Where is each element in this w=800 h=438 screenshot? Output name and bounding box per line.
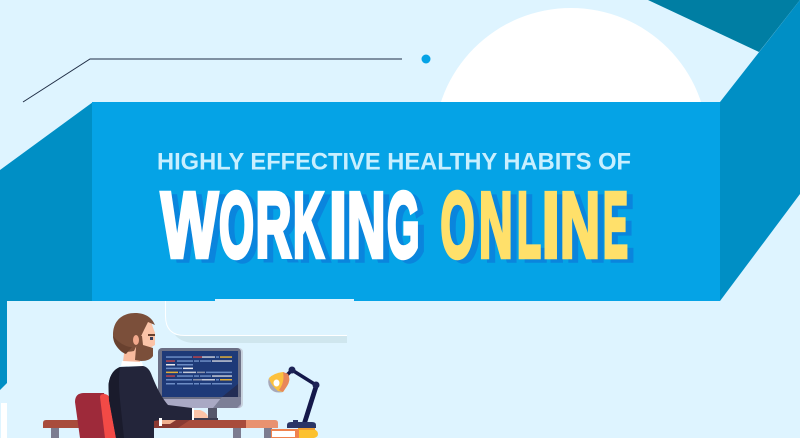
title shadow: I: [548, 176, 566, 280]
code lines: [166, 356, 232, 384]
word: online: I: [542, 173, 560, 277]
word: online: N: [479, 173, 513, 277]
word: online: O: [440, 173, 474, 277]
title shadow: W: [167, 176, 224, 280]
title shadow: N: [566, 176, 606, 280]
word: working: W: [161, 173, 218, 277]
title shadow: R: [262, 176, 298, 280]
white strip at left edge: [1, 403, 7, 438]
left ribbon fold: [0, 102, 93, 390]
desk: [43, 420, 278, 428]
beard: [135, 336, 153, 361]
title: working online: G: [387, 173, 420, 277]
right ribbon fold: [720, 0, 800, 301]
top-right dark teal shape: [648, 0, 800, 52]
desk lamp: [268, 366, 320, 428]
lamp shade: [269, 372, 289, 392]
torso and arm: [108, 366, 192, 438]
books: [271, 428, 318, 438]
title shadow: I: [335, 176, 353, 280]
title: working online: [161, 173, 634, 280]
curved white line with shadow: [166, 301, 347, 343]
title shadow: [167, 176, 634, 280]
white sun circle: [434, 8, 708, 282]
decorative line top left: [23, 59, 402, 102]
person: [108, 313, 208, 438]
infographic header: E: [609, 176, 634, 280]
eyebrow and eye: [148, 334, 155, 336]
main blue banner: [92, 102, 720, 301]
title shadow: O: [446, 176, 480, 280]
title shadow: O: [225, 176, 260, 280]
title shadow: G: [393, 176, 426, 280]
blue dot: [422, 54, 430, 64]
monitor: [158, 348, 243, 421]
infographic header: E: [603, 173, 628, 277]
collar: [121, 361, 143, 366]
word: online: L: [517, 173, 541, 277]
desk legs: [51, 428, 272, 438]
neck: [123, 345, 140, 362]
title shadow: N: [485, 176, 519, 280]
hand on keyboard: [193, 410, 208, 418]
title shadow: N: [353, 176, 392, 280]
title shadow: L: [523, 176, 547, 280]
ear: [133, 335, 139, 345]
word: working: R: [256, 173, 292, 277]
word: working: K: [293, 173, 324, 277]
word: working: I: [329, 173, 347, 277]
word: working: O: [219, 173, 254, 277]
lamp base: [287, 422, 316, 428]
banner notch: [215, 299, 354, 301]
chair: [75, 393, 117, 438]
hair: [113, 313, 155, 352]
lamp arm: [286, 370, 316, 385]
shirt cuffs: [192, 408, 194, 420]
word: working: N: [347, 173, 386, 277]
face: [136, 319, 155, 356]
title shadow: K: [299, 176, 330, 280]
word: online: N: [560, 173, 600, 277]
subtitle: HIGHLY EFFECTIVE HEALTHY HABITS OF: [157, 148, 631, 176]
